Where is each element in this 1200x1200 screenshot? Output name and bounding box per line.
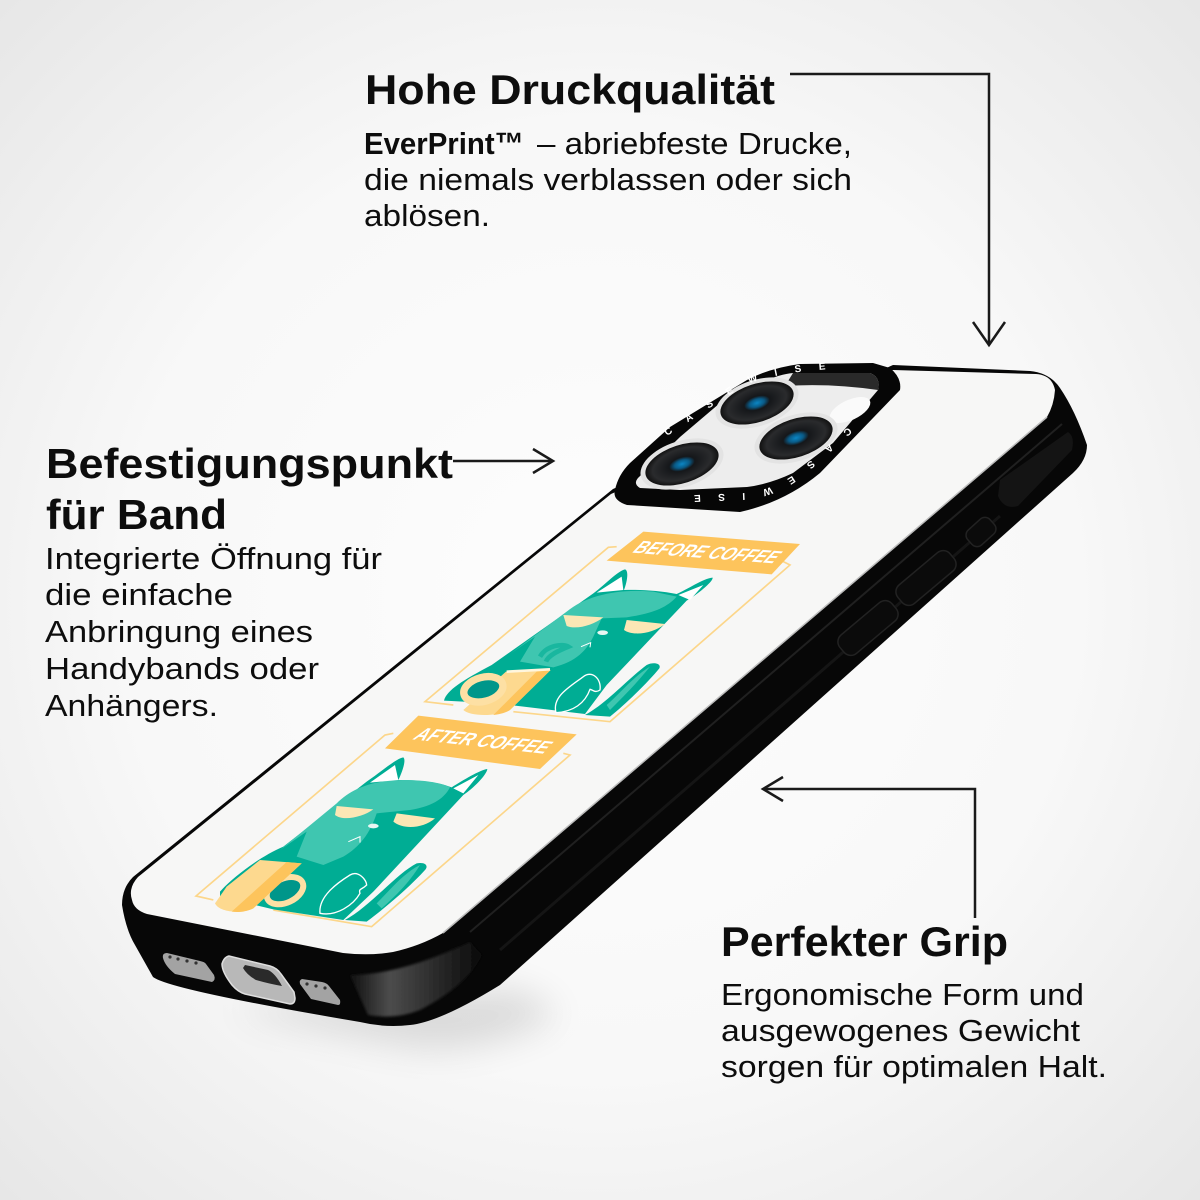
camera inner wall (785, 373, 879, 390)
text block: attachment description: Handybands oder (45, 651, 319, 686)
text block: attachment description: die einfache (45, 577, 233, 612)
arrow: print quality to case top (790, 74, 1005, 345)
text block: attachment description: Integrierte Öffnung für (45, 541, 382, 576)
ring text top: CASEWISE (664, 364, 826, 435)
text block: print quality description: EverPrint™ (364, 126, 524, 161)
side ridge (470, 424, 1062, 932)
artwork: before coffee (425, 532, 800, 722)
text block: print quality description: ablösen. (364, 198, 490, 233)
text block: grip description: Ergonomische Form und (721, 977, 1084, 1012)
back panel (131, 370, 1055, 954)
heading: Hohe Druckqualität: Hohe Druckqualität (365, 66, 775, 113)
heading: Befestigungspunkt für Band: Befestigungspunkt (46, 440, 453, 487)
lens right (748, 403, 844, 473)
artwork: after coffee: AFTER COFFEE (408, 724, 556, 758)
text block: attachment description: Anbringung eines (45, 614, 313, 649)
artwork: after coffee (196, 716, 577, 927)
side button: volume up (892, 547, 960, 609)
side panel texture (500, 516, 1000, 950)
heading: Perfekter Grip: Perfekter Grip (721, 918, 1008, 965)
ring text bottom: CASEWISE (694, 428, 852, 502)
text block: print quality description: – abriebfeste Drucke, (537, 126, 852, 161)
heading: Befestigungspunkt für Band (46, 440, 453, 538)
phone case (122, 363, 1087, 1026)
text block: grip description: sorgen für optimalen Halt. (721, 1049, 1107, 1084)
arrow: grip (763, 777, 975, 918)
text block: grip description (721, 977, 1107, 1084)
text block: print quality description: die niemals verblassen oder sich (364, 162, 852, 197)
text block: attachment description (45, 541, 382, 723)
speaker grill left (163, 953, 215, 982)
camera flash (826, 392, 874, 428)
speaker grill right (300, 979, 340, 1005)
lens top (709, 368, 805, 438)
phone shadow (230, 990, 560, 1049)
text block: print quality description (364, 126, 852, 233)
side button: action (963, 515, 999, 549)
panel edge highlight (443, 417, 1047, 933)
side button: volume down (834, 597, 902, 659)
heading: Befestigungspunkt für Band: für Band (46, 491, 227, 538)
lens left (634, 429, 730, 499)
text block: grip description: ausgewogenes Gewicht (721, 1013, 1080, 1048)
case body (122, 365, 1087, 1026)
camera control button (998, 432, 1073, 507)
corner highlight (350, 942, 482, 1017)
arrow: attachment point (453, 449, 553, 473)
text block: attachment description: Anhängers. (45, 688, 218, 723)
charging port (222, 956, 295, 1004)
artwork: before coffee: BEFORE COFFEE (629, 538, 786, 568)
camera ring (614, 363, 900, 512)
grill dots (168, 955, 327, 990)
camera window (636, 373, 879, 490)
